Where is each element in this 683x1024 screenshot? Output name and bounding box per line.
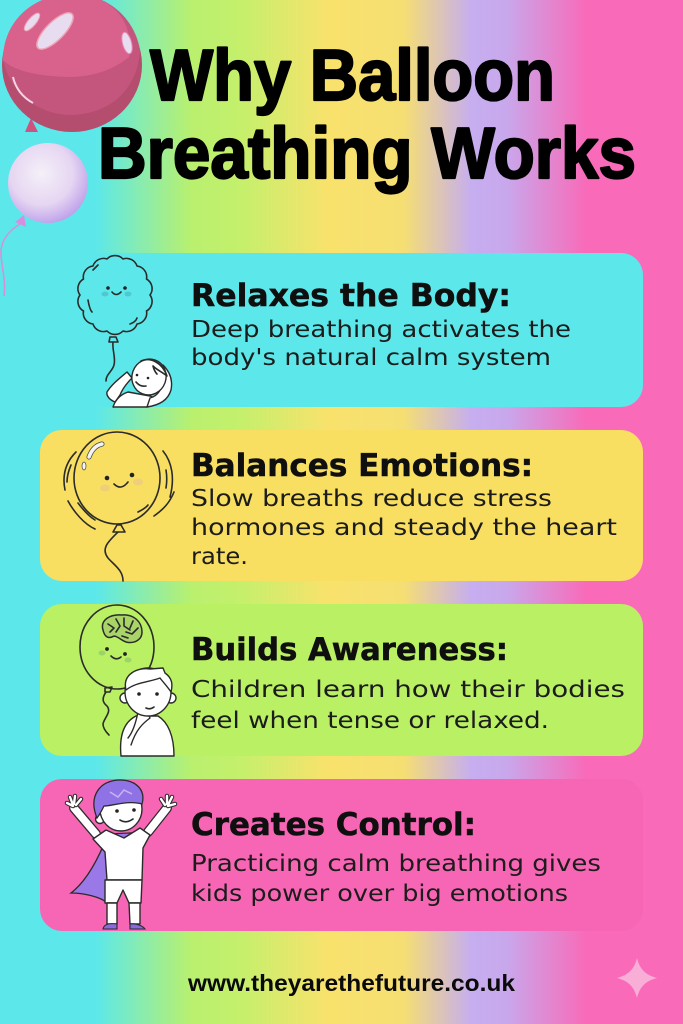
text block xyxy=(191,807,601,907)
panel: balances emotions xyxy=(40,430,643,581)
balloon: lavender xyxy=(1,143,88,296)
website url: www.theyarethefuture.co.uk xyxy=(187,970,515,996)
title xyxy=(98,36,636,194)
text block xyxy=(191,632,625,734)
balloon: pink xyxy=(2,0,142,132)
text block: rate. xyxy=(191,544,248,570)
title: Why Balloon xyxy=(150,36,555,116)
icon: smiling balloon xyxy=(64,432,174,581)
text block xyxy=(191,448,617,570)
text block: Slow breaths reduce stress xyxy=(191,486,552,512)
text block: Balances Emotions: xyxy=(191,448,533,484)
icon: sparkle xyxy=(617,958,657,998)
panel: relaxes the body xyxy=(40,253,643,407)
text block: kids power over big emotions xyxy=(191,881,568,907)
icon: cloud balloon and resting child xyxy=(78,256,172,407)
icon: child with cape xyxy=(67,780,175,929)
text block: Builds Awareness: xyxy=(191,632,508,668)
text block: body's natural calm system xyxy=(191,345,551,371)
text block: Children learn how their bodies xyxy=(191,677,625,703)
panel: builds awareness xyxy=(40,604,643,756)
text block: hormones and steady the heart xyxy=(191,515,617,541)
panel: creates control xyxy=(40,779,643,931)
text block: feel when tense or relaxed. xyxy=(191,708,549,734)
text block: Practicing calm breathing gives xyxy=(191,851,601,877)
title: Breathing Works xyxy=(98,114,636,194)
icon: brain balloon and thinking child xyxy=(80,605,176,756)
text block: Creates Control: xyxy=(191,807,476,843)
text block xyxy=(191,278,571,371)
text block: Relaxes the Body: xyxy=(191,278,511,314)
text block: Deep breathing activates the xyxy=(191,317,571,343)
